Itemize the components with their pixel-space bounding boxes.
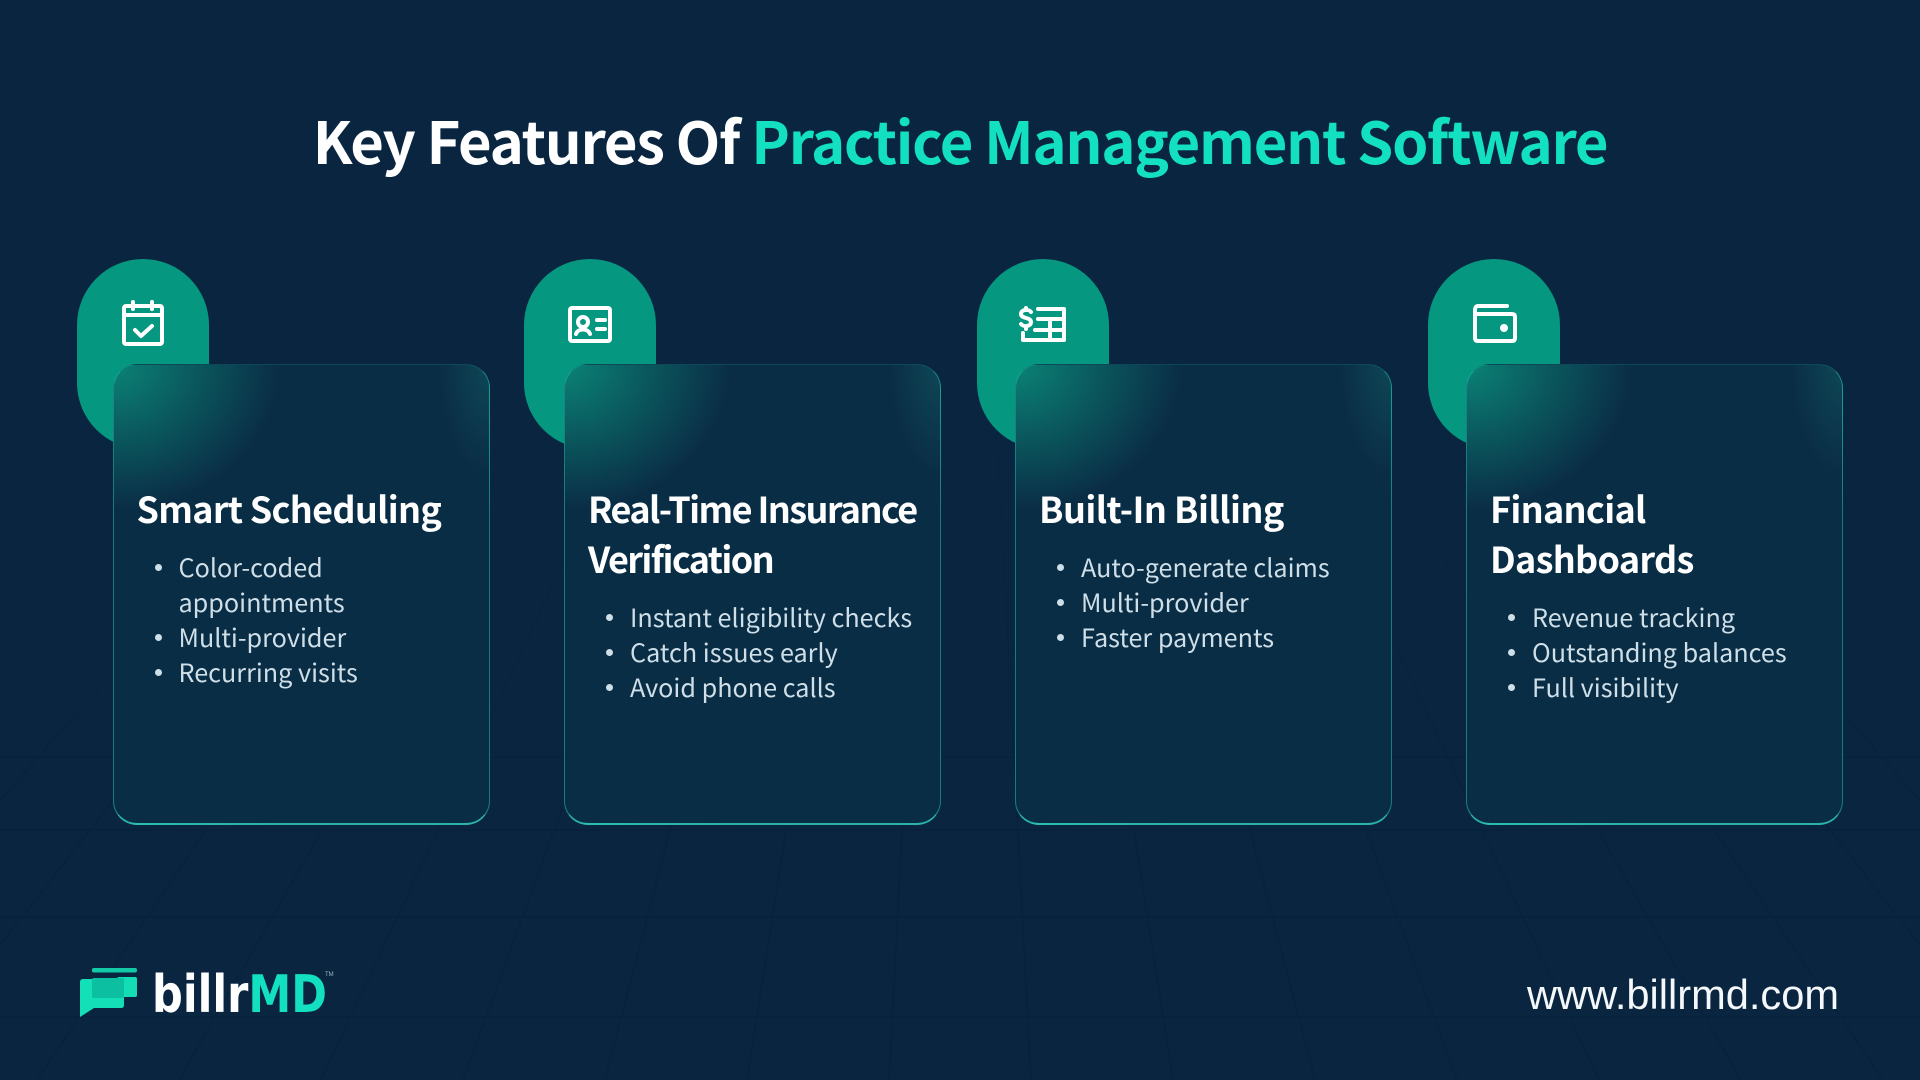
- panel: real-time insurance verification: [564, 364, 941, 825]
- website url: www.billrmd.com: [1527, 971, 1839, 1018]
- list: smart scheduling points: Multi-provider: [178, 619, 346, 655]
- icon: wallet: [1473, 304, 1517, 343]
- heading: smart scheduling: Smart Scheduling: [136, 482, 441, 534]
- trademark mark: TM: [325, 972, 334, 978]
- list: dashboard points: [1508, 599, 1787, 705]
- wordmark: billrMD: [152, 965, 327, 1025]
- logo: billrMD: [80, 965, 334, 1025]
- list: insurance points: [606, 599, 912, 705]
- list: billing points: Auto-generate claims: [1081, 549, 1330, 585]
- list: insurance points: Catch issues early: [630, 634, 838, 670]
- title: Key Features Of Practice Management Software: [313, 97, 1607, 181]
- list: dashboard points: Full visibility: [1532, 669, 1679, 705]
- icon: calendar check: [122, 300, 164, 346]
- list: insurance points: Avoid phone calls: [630, 669, 836, 705]
- list: billing points: Multi-provider: [1081, 584, 1249, 620]
- icon pill: billing: [977, 259, 1109, 449]
- heading: built-in billing: Built-In Billing: [1039, 482, 1284, 534]
- heading: real-time insurance verification: Real-Time Insurance Verification: [588, 482, 917, 584]
- panel: financial dashboards: [1466, 364, 1843, 825]
- list: smart scheduling points: Color-coded appointments: [178, 549, 345, 620]
- panel: built-in billing: [1015, 364, 1392, 825]
- list: dashboard points: Revenue tracking: [1532, 599, 1735, 635]
- icon pill: wallet: [1428, 259, 1560, 449]
- icon pill: calendar: [77, 259, 209, 449]
- icon pill: id card: [524, 259, 656, 449]
- list: smart scheduling points: Recurring visits: [178, 654, 358, 690]
- list: billing points: [1057, 549, 1330, 655]
- list: billing points: Faster payments: [1081, 619, 1274, 655]
- panel: smart scheduling: [112, 364, 490, 825]
- icon: id card: [568, 306, 612, 343]
- list: dashboard points: Outstanding balances: [1532, 634, 1787, 670]
- heading: financial dashboards: Financial Dashboards: [1490, 482, 1694, 584]
- icon: chat bubbles: [80, 968, 137, 1017]
- list: insurance points: Instant eligibility checks: [630, 599, 912, 635]
- list: smart scheduling points: [155, 549, 358, 690]
- icon: billing table: [1018, 306, 1066, 342]
